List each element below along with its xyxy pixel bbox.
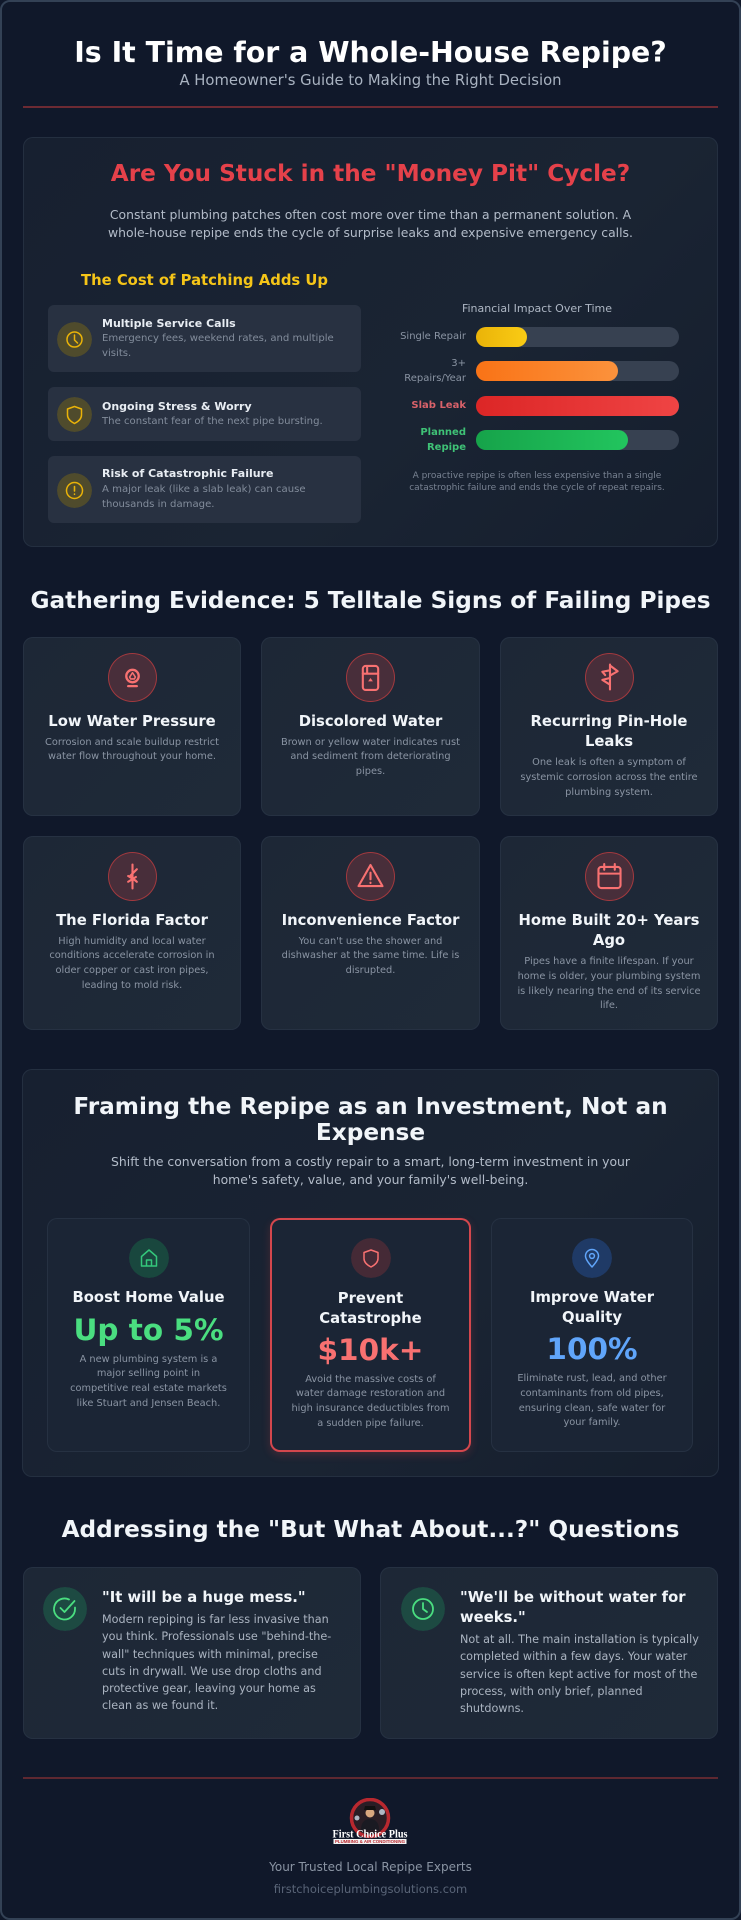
label: 3+ repairs	[404, 358, 466, 384]
heading: Expense	[316, 1119, 425, 1146]
card text: contaminants from old pipes,	[520, 1388, 664, 1399]
objection answer: wall" techniques with minimal, precise	[102, 1648, 318, 1661]
objection title: "It will be a huge mess."	[102, 1589, 306, 1606]
card title: Ago	[593, 932, 625, 949]
card text: major selling point in	[97, 1368, 200, 1379]
icon: clock	[57, 322, 92, 357]
objection title	[460, 1589, 686, 1626]
objection answer: completed within a few days. Your water	[460, 1650, 687, 1663]
label: planned repipe: Planned	[420, 427, 466, 438]
footer	[23, 1777, 718, 1896]
objection answer: cuts in drywall. We use drop cloths and	[102, 1665, 322, 1678]
panel: failing pipe signs	[23, 637, 718, 1030]
intro text: home's safety, value, and your family's well-being.	[213, 1172, 528, 1187]
intro text	[108, 207, 633, 240]
card text: pipes.	[356, 766, 385, 777]
objection answer: you think. Professionals use "behind-the-	[102, 1630, 331, 1643]
card text: You can't use the shower and	[299, 936, 442, 946]
objection title: weeks."	[460, 1609, 526, 1626]
card text	[70, 1354, 227, 1409]
intro text: Constant plumbing patches often cost more over time than a permanent solution. A	[110, 207, 631, 222]
panel: money pit cycle	[23, 137, 718, 547]
item title: Multiple Service Calls	[102, 317, 236, 330]
card text	[517, 1373, 667, 1428]
card title: Low Water Pressure	[48, 713, 216, 730]
card title: Boost Home Value	[72, 1289, 225, 1306]
card: prevent catastrophe	[270, 1218, 471, 1452]
icon: house	[129, 1238, 169, 1278]
objection answer	[460, 1633, 699, 1715]
card text: Eliminate rust, lead, and other	[517, 1373, 667, 1384]
objection title: "We'll be without water for	[460, 1589, 686, 1606]
card text: conditions accelerate corrosion in	[49, 950, 215, 961]
panel: investment	[22, 1069, 719, 1477]
card title: Home Built 20+ Years	[519, 912, 699, 929]
section heading: objections: Addressing the "But What About...?" Questions	[62, 1516, 679, 1543]
card text: high insurance deductibles from	[291, 1403, 450, 1414]
card text: Avoid the massive costs of	[305, 1374, 436, 1384]
icon: clock	[401, 1587, 445, 1631]
card title	[531, 713, 687, 750]
card text: water damage restoration and	[296, 1388, 445, 1399]
item text: thousands in damage.	[102, 499, 214, 510]
card text: Brown or yellow water indicates rust	[281, 736, 460, 748]
cost subheading: The Cost of Patching Adds Up	[81, 272, 328, 289]
subtitle: A Homeowner's Guide to Making the Right Decision	[179, 72, 562, 89]
bar: planned repipe	[476, 430, 679, 450]
card title: The Florida Factor	[56, 912, 208, 929]
card text: Pipes have a finite lifespan. If your	[524, 956, 694, 967]
big number: $10k+	[318, 1333, 423, 1367]
card text: older copper or cast iron pipes,	[56, 965, 208, 976]
card text	[45, 736, 219, 762]
card: florida factor	[23, 836, 241, 1030]
bar chart: financial impact	[400, 302, 679, 493]
label: planned repipe	[420, 427, 466, 453]
big number: 100%	[546, 1332, 638, 1366]
card text	[291, 1374, 450, 1429]
bar: single repair	[476, 327, 679, 347]
item text: A major leak (like a slab leak) can cause	[102, 484, 306, 495]
icon: water heater	[346, 653, 395, 702]
item title: Risk of Catastrophic Failure	[102, 467, 273, 480]
label: single repair: Single Repair	[400, 331, 466, 342]
card title: Prevent	[338, 1290, 403, 1307]
card text: Corrosion and scale buildup restrict	[45, 736, 219, 748]
icon: shield	[57, 397, 92, 432]
card title: Leaks	[585, 733, 633, 750]
label: planned repipe: Repipe	[427, 442, 466, 453]
heading: Framing the Repipe as an Investment, Not an	[73, 1093, 668, 1120]
card text	[520, 757, 698, 798]
logo: First Choice Plus: PLUMBING & AIR CONDITIONING	[335, 1839, 405, 1844]
card title: Discolored Water	[299, 713, 442, 730]
icon: corrosion	[108, 852, 157, 901]
card: huge mess objection	[23, 1567, 361, 1739]
card: discolored water	[261, 637, 480, 816]
section heading: five signs: Gathering Evidence: 5 Telltale Signs of Failing Pipes	[30, 587, 711, 614]
intro text: whole-house repipe ends the cycle of surprise leaks and expensive emergency calls.	[108, 225, 633, 240]
card text: is likely nearing the end of its service	[517, 986, 701, 997]
objection answer: Not at all. The main installation is typically	[460, 1633, 699, 1646]
card: inconvenience factor	[261, 836, 480, 1030]
card title: Quality	[562, 1309, 622, 1326]
objection answer: clean as we found it.	[102, 1699, 218, 1712]
card text: life.	[600, 1000, 618, 1011]
heading	[73, 1093, 668, 1146]
card text: like Stuart and Jensen Beach.	[77, 1398, 220, 1409]
item text: visits.	[102, 348, 131, 359]
chart note	[409, 471, 665, 493]
card text: ensuring clean, safe water for	[519, 1403, 665, 1414]
card text: competitive real estate markets	[70, 1383, 227, 1394]
icon: gauge	[108, 653, 157, 702]
objection answer: process, with only brief, planned	[460, 1685, 643, 1698]
card text: plumbing system.	[565, 787, 653, 798]
big number: Up to 5%	[73, 1313, 224, 1347]
card text: leading to mold risk.	[82, 980, 182, 991]
icon: pipe split	[585, 653, 634, 702]
card title: Inconvenience Factor	[282, 912, 459, 929]
card: improve water quality	[491, 1218, 693, 1452]
card text: water flow throughout your home.	[48, 751, 216, 762]
chart note: A proactive repipe is often less expensive than a single	[413, 471, 661, 481]
card text	[517, 956, 701, 1011]
tagline: Your Trusted Local Repipe Experts	[269, 1860, 472, 1874]
card title	[530, 1289, 654, 1326]
item text: The constant fear of the next pipe bursting.	[102, 416, 323, 427]
bar: 3+ repairs	[476, 361, 679, 381]
card title	[319, 1290, 422, 1327]
icon: check circle	[43, 1587, 87, 1631]
objection answer: shutdowns.	[460, 1702, 524, 1715]
card title: Recurring Pin-Hole	[531, 713, 687, 730]
icon: shield	[351, 1238, 391, 1278]
intro text: Shift the conversation from a costly repair to a smart, long-term investment in your	[111, 1154, 630, 1169]
objection answer: protective gear, leaving your home as	[102, 1682, 316, 1695]
label: 3+ repairs: 3+	[451, 358, 466, 369]
card text: and sediment from deteriorating	[290, 751, 451, 762]
label: slab leak: Slab Leak	[411, 400, 466, 411]
footer divider	[23, 1777, 718, 1779]
card text: home is older, your plumbing system	[518, 971, 700, 982]
card text: systemic corrosion across the entire	[520, 772, 698, 783]
card text: High humidity and local water	[58, 936, 206, 946]
card text	[282, 936, 459, 976]
icon: calendar	[585, 852, 634, 901]
card: home built 20+ years ago	[500, 836, 718, 1030]
card: boost home value	[47, 1218, 250, 1452]
header	[23, 36, 718, 108]
objection answer	[102, 1613, 331, 1712]
card text	[281, 736, 460, 777]
item text	[102, 484, 306, 510]
card text: One leak is often a symptom of	[532, 757, 686, 768]
header divider	[23, 106, 718, 108]
label: 3+ repairs: Repairs/Year	[404, 373, 466, 384]
icon: location pin	[572, 1238, 612, 1278]
card text	[49, 936, 215, 991]
website: firstchoiceplumbingsolutions.com	[274, 1882, 467, 1896]
title: Is It Time for a Whole-House Repipe?	[74, 36, 667, 69]
chart note: catastrophic failure and ends the cycle of repeat repairs.	[409, 483, 665, 493]
item text: Emergency fees, weekend rates, and multiple	[102, 333, 334, 344]
item: ongoing stress	[48, 387, 361, 441]
icon: warning	[346, 852, 395, 901]
heading: Are You Stuck in the "Money Pit" Cycle?	[111, 160, 630, 187]
card title: Catastrophe	[319, 1310, 422, 1327]
chart title: Financial Impact Over Time	[462, 302, 612, 315]
item text	[102, 333, 334, 359]
card title: Improve Water	[530, 1289, 654, 1306]
card: low water pressure	[23, 637, 241, 816]
item: multiple service calls	[48, 305, 361, 372]
bar: slab leak	[476, 396, 679, 416]
card text: dishwasher at the same time. Life is	[282, 950, 459, 961]
item: catastrophic failure	[48, 456, 361, 523]
card: without water objection	[380, 1567, 718, 1739]
card: pin-hole leaks	[500, 637, 718, 816]
card title	[519, 912, 699, 949]
card text: your family.	[563, 1417, 621, 1428]
intro text	[111, 1154, 630, 1187]
logo: First Choice Plus	[332, 1798, 408, 1844]
item title: Ongoing Stress & Worry	[102, 400, 252, 413]
card text: a sudden pipe failure.	[317, 1418, 424, 1429]
objection answer: Modern repiping is far less invasive than	[102, 1613, 329, 1626]
card text: disrupted.	[346, 965, 395, 976]
icon: alert	[57, 473, 92, 508]
objection answer: service is often kept active for most of the	[460, 1668, 697, 1681]
card text: A new plumbing system is a	[80, 1354, 217, 1364]
